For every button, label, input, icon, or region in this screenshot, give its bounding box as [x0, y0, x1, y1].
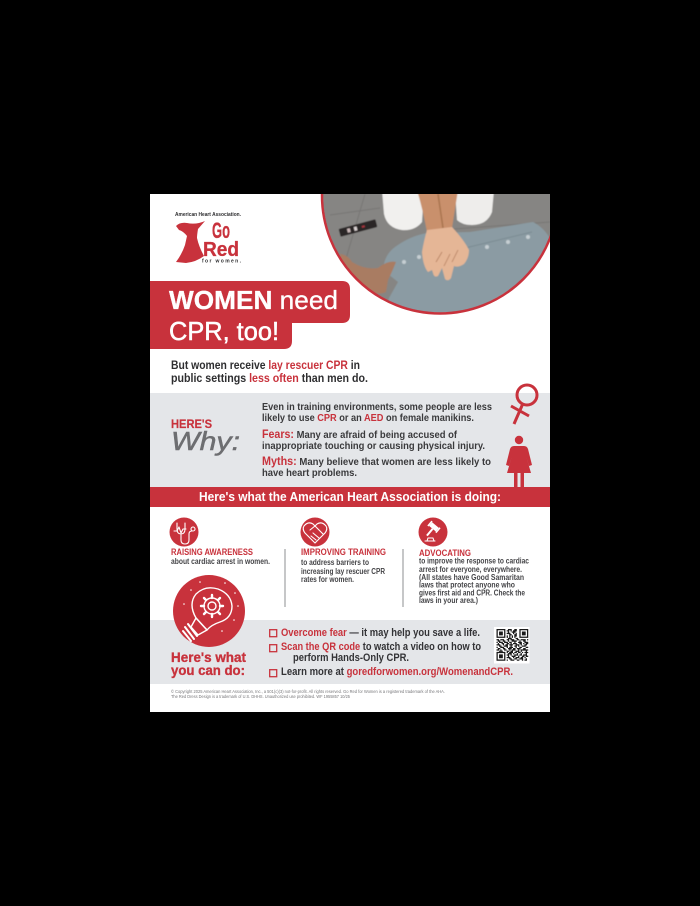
- logo: Go Red for Women: [175, 212, 242, 264]
- heading: here's what you can do: [171, 649, 246, 678]
- shirt buttons: [402, 235, 530, 264]
- logo: association name: American Heart Association.: [175, 212, 242, 218]
- text: training environments: likely to use CPR or an AED on female manikins.: [262, 413, 474, 424]
- banner: what AHA is doing: Here's what the American Heart Association is doing:: [199, 490, 501, 504]
- page sheet: [150, 194, 550, 712]
- body: [301, 558, 385, 584]
- banner: what AHA is doing: [150, 487, 550, 507]
- body: laws in your area.): [419, 596, 478, 605]
- logo: Red: Red: [203, 239, 239, 261]
- text: training environments: [262, 402, 492, 424]
- panel: advocating: [418, 518, 529, 605]
- footer legal text: © Copyright 2025 American Heart Association, Inc., a 501(c)(3) not-for-profit. All rights reserved. Go Red for Women is a registered trademark of the AHA.: [171, 689, 445, 694]
- text: fears: inappropriate touching or causing physical injury.: [262, 441, 485, 452]
- icon: female symbol: [511, 385, 537, 424]
- title banner: [150, 281, 350, 349]
- QR code: [494, 627, 530, 664]
- arms: [418, 194, 458, 231]
- body: laws that protect anyone who: [419, 580, 515, 590]
- text: myths: have heart problems.: [262, 468, 357, 479]
- panel: what you can do: [150, 620, 550, 684]
- heading: here's what you can do: you can do:: [171, 662, 245, 678]
- feedback device: [339, 219, 377, 237]
- logo: Go: Go: [212, 218, 230, 243]
- body: about cardiac arrest in women.: [171, 557, 270, 566]
- title line 1: WOMEN need: [169, 285, 338, 315]
- heading: ADVOCATING: [419, 547, 471, 558]
- icon: gavel: [418, 518, 448, 546]
- subheading: public settings less often than men do.: [171, 371, 368, 385]
- photo red ring: [320, 194, 550, 315]
- icon: lightbulb with gear: [173, 575, 245, 647]
- icon: stethoscope: [170, 518, 198, 546]
- heading: IMPROVING TRAINING: [301, 546, 386, 557]
- body: to improve the response to cardiac: [419, 556, 529, 566]
- panel: raising awareness: [170, 518, 270, 566]
- hands: [422, 227, 469, 280]
- icon: red dress: [176, 221, 205, 263]
- checklist item: learn more: Learn more at goredforwomen.org/WomenandCPR.: [281, 666, 513, 678]
- body: to address barriers to: [301, 558, 369, 567]
- heading: why: Why:: [171, 426, 240, 456]
- body: (All states have Good Samaritan: [419, 573, 524, 582]
- text: fears: Fears: Many are afraid of being accused of: [262, 429, 458, 441]
- icon: handshake heart: [300, 518, 330, 546]
- text: myths: [262, 456, 491, 479]
- title line 2: CPR, too!: [169, 316, 279, 346]
- text: training environments: Even in training environments, some people are less: [262, 402, 492, 413]
- body: rates for women.: [301, 575, 354, 584]
- body: increasing lay rescuer CPR: [301, 567, 385, 576]
- body: arrest for everyone, everywhere.: [419, 565, 522, 574]
- helper hand: [340, 254, 396, 294]
- checklist item: overcome fear: Overcome fear — it may help you save a life.: [281, 627, 480, 639]
- heading: here's what you can do: Here's what: [171, 649, 246, 665]
- logo: for women: for women.: [202, 258, 242, 264]
- text: fears: [262, 429, 485, 452]
- icon: woman figure: [506, 436, 532, 488]
- checklist item: scan the QR code: [270, 641, 481, 664]
- subheading: But women receive lay rescuer CPR in: [171, 358, 360, 372]
- knees: [382, 190, 424, 230]
- footer legal text: The Red Dress Design is a trademark of U.S. DHHS. Unauthorized use prohibited. WF 1955857 10/25: [171, 694, 350, 699]
- heading: RAISING AWARENESS: [171, 546, 253, 557]
- checklist item: scan the QR code: Scan the QR code to watch a video on how to: [281, 641, 481, 653]
- body: [419, 556, 529, 605]
- footer legal text: [171, 689, 445, 699]
- body: gives first aid and CPR. Check the: [419, 588, 525, 598]
- shirt: [383, 222, 552, 320]
- photo: hands-only CPR on a manikin: [320, 194, 550, 315]
- heading: here's: HERE'S: [171, 419, 212, 431]
- panel: here's why: [150, 393, 550, 487]
- checklist item: scan the QR code: perform Hands-Only CPR.: [293, 652, 409, 664]
- text: myths: Myths: Many believe that women are less likely to: [262, 456, 491, 468]
- subheading: [171, 358, 368, 385]
- panel: improving training: [300, 518, 386, 584]
